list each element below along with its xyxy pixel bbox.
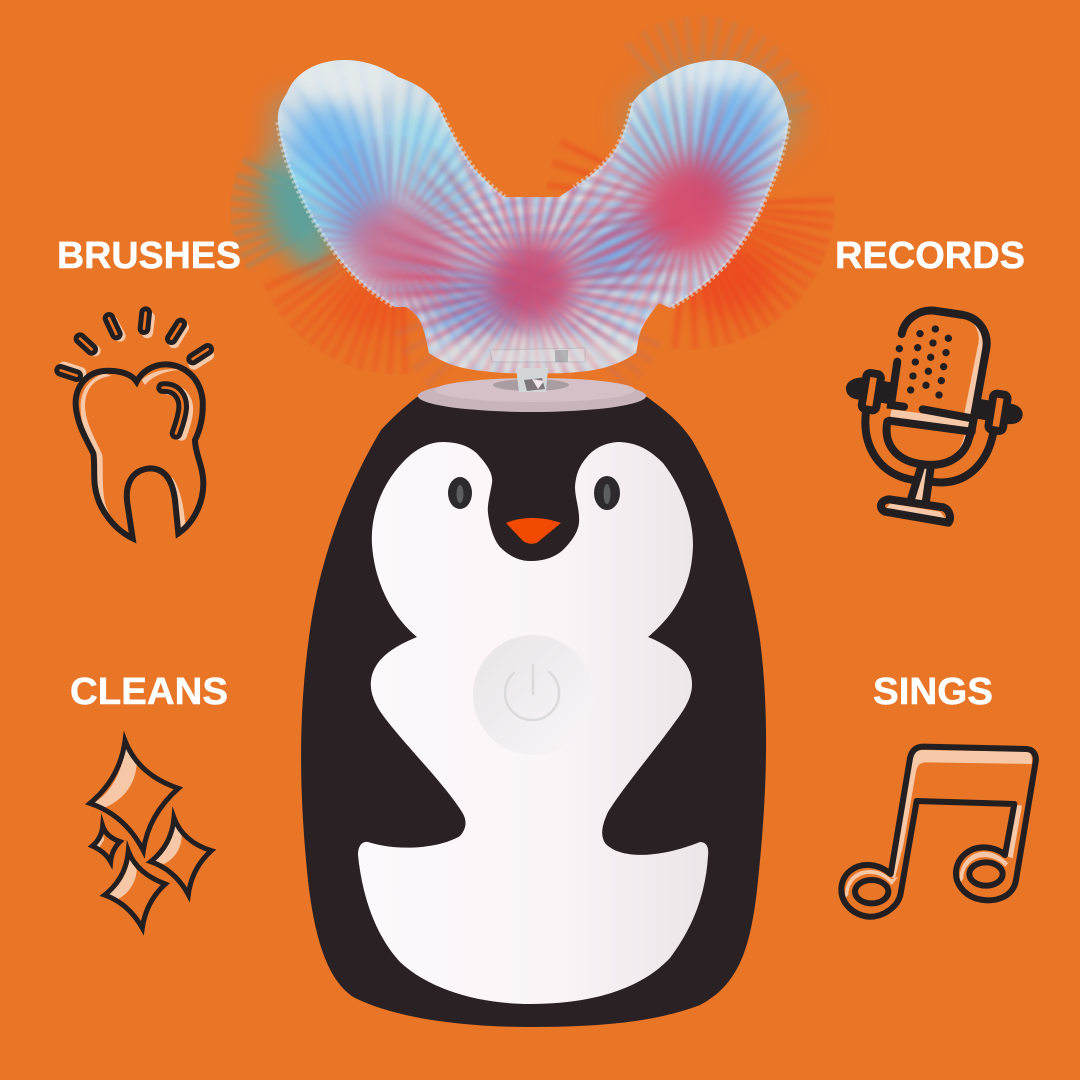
label: BRUSHES: BRUSHES xyxy=(57,235,241,277)
blue rays: left lobe xyxy=(278,72,575,373)
icon: tooth with shine marks xyxy=(54,306,214,544)
penguin toothbrush body xyxy=(301,368,766,1027)
brush silicone head xyxy=(278,60,789,374)
outer glow: red lower left xyxy=(335,285,420,330)
outer glow: right side green-grey xyxy=(625,70,800,170)
label: RECORDS: RECORDS xyxy=(835,235,1025,277)
blue area lower right xyxy=(572,203,672,296)
blue area lower centre xyxy=(430,270,525,335)
bristle rays: right xyxy=(566,84,786,321)
spikes: upper right blue-grey xyxy=(625,16,812,114)
blue area right lobe xyxy=(682,72,788,216)
toothbrush head with glowing bristles xyxy=(230,16,834,386)
label: CLEANS: CLEANS xyxy=(70,671,228,713)
top collar xyxy=(418,378,646,412)
icon: microphone xyxy=(846,306,1023,527)
bristle rays: left xyxy=(300,138,486,330)
pale base xyxy=(425,335,640,375)
power button xyxy=(473,635,593,755)
left eye xyxy=(448,477,472,509)
icon: sparkles xyxy=(85,730,216,936)
pale top of left lobe xyxy=(290,55,400,100)
white belly xyxy=(358,442,708,1004)
pink area left xyxy=(338,195,466,317)
spikes: centre lower faint xyxy=(394,322,661,386)
icon: music notes xyxy=(838,744,1039,920)
body black shell xyxy=(301,397,766,1027)
beak xyxy=(506,518,561,544)
outer glow: grey-green upper left xyxy=(266,90,302,180)
light teal area left inner xyxy=(383,100,480,229)
spikes: left teal xyxy=(230,156,316,270)
red core centre xyxy=(488,240,576,325)
bristle rays: centre xyxy=(371,140,694,374)
right eye xyxy=(594,476,620,510)
glass neck xyxy=(516,368,548,392)
blue rays: right lobe xyxy=(516,60,789,361)
blue area left lobe xyxy=(278,92,403,260)
outer glow: teal left xyxy=(247,143,349,282)
light blue area right inner xyxy=(614,89,690,188)
clip holders xyxy=(861,372,1008,432)
spikes: right red xyxy=(546,140,834,350)
label: SINGS: SINGS xyxy=(873,671,993,713)
outer glow: red lower right xyxy=(680,245,775,315)
spikes: lower left red xyxy=(264,253,408,374)
red core right xyxy=(621,139,759,276)
cyan edge left lobe xyxy=(289,162,337,236)
pale top of right lobe xyxy=(680,55,770,83)
